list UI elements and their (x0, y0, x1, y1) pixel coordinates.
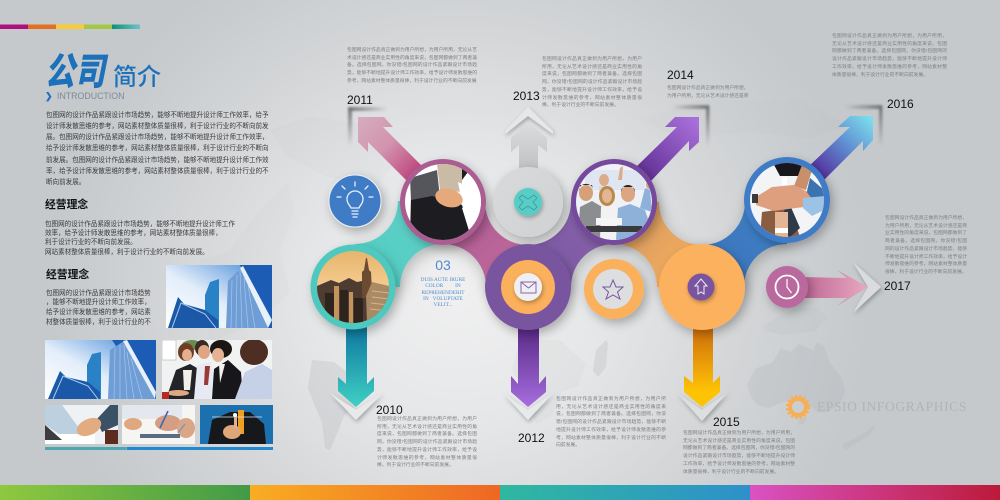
intro paragraph: 断向前发展。 (46, 179, 85, 186)
text: 2016 description: 包图网设计作品真正做到为用户所想，为用户所用，无论从艺术设计感还是商业实用性的角度来说，包图网都做到了两者兼备。选择包图网，你没错!包图网的设计作品紧跟设计市场趋势，能够不断地提升设计师工作效率，给予设计师发散思维的参考，网站素材整体质量很棒，利于设计行业的不断向前发展。 (832, 34, 947, 78)
intro paragraph: 率，给予设计师发散思维的参考，网站素材整体质量很棒，利于设计行业的不 (46, 168, 269, 175)
world map background (200, 100, 875, 450)
heading: 经营理念 second: 经营理念 (46, 269, 89, 281)
title: 公司简介: 公司 (45, 52, 105, 93)
node: lightbulb icon (329, 175, 381, 227)
arrow 2014 (634, 117, 699, 183)
callout: 03: 03 (435, 257, 451, 273)
flowing connector: teal (353, 201, 443, 287)
philosophy paragraph second: ，能够不断地提升设计师工作效率， (46, 299, 151, 306)
intro paragraph: 包图网的设计作品紧跟设计市场趋势，能够不断地提升设计师工作效率，给予 (46, 112, 269, 118)
logo text: EPSIO INFOGRAPHICS (817, 399, 967, 414)
philosophy paragraph: 效率，给予设计师发散思维的参考，网站素材整体质量很棒， (45, 230, 222, 237)
node: upload house icon (659, 244, 745, 330)
philosophy paragraph: 网站素材整体质量很棒，利于设计行业的不断向前发展。 (45, 249, 209, 256)
arrow 2015 (684, 325, 720, 407)
node: city skyline photo (310, 244, 396, 330)
flowing connector: orange (614, 202, 702, 287)
philosophy paragraph: 包图网的设计作品紧跟设计市场趋势，能够不断地提升设计师工作 (45, 220, 235, 228)
year: 2015: 2015 (713, 415, 740, 429)
text: 2014 description: 包图网设计作品真正做到为用户所想， (667, 86, 749, 91)
year: 2016: 2016 (887, 97, 914, 111)
callout: 03: VELIT... (434, 302, 452, 308)
text: 2017 description: 包图网设计作品真正做到为用户所想，为用户所用，无论从艺术设计感还是商业实用性的角度来说，包图网都做到了两者兼备。选择包图网，你没错!包图网的设计作品紧跟设计市场趋势，能够不断地提升设计师工作效率，给予设计师发散思维的参考，网站素材整体质量很棒，利于设计行业的不断向前发展。 (885, 216, 967, 275)
year: 2012: 2012 (518, 431, 545, 445)
philosophy paragraph second (46, 289, 151, 326)
text: 2014 description: 为用户所用，无论从艺术设计感还是商 (667, 94, 749, 99)
callout: 03: COLOR IN (425, 283, 461, 289)
photo: touch screen businessman (200, 405, 273, 444)
bottom colour bar (0, 485, 1000, 500)
intro paragraph: 设计师发散思维的参考，网站素材整体质量很棒，利于设计行业的不断向前发 (46, 123, 269, 130)
subtitle: INTRODUCTION: INTRODUCTION (57, 91, 124, 101)
intro paragraph: 给予设计师发散思维的参考，网站素材整体质量很棒，利于设计行业的不断向 (46, 145, 269, 152)
arrow backplate 2012 (503, 393, 553, 420)
arrow backplate 2010 (330, 393, 383, 420)
node: grey X icon (493, 167, 563, 237)
node: clock icon (766, 266, 808, 308)
callout: 03: REPREHENDERIT (422, 290, 464, 296)
title: 公司简介 (45, 52, 161, 93)
photo: writing at desk (122, 405, 195, 444)
subtitle: INTRODUCTION: ❯ (45, 91, 53, 101)
philosophy paragraph second: 包图网的设计作品紧跟设计市场趋势 (46, 290, 151, 296)
photo: office tower large (45, 340, 156, 399)
node: mail icon (485, 244, 571, 330)
text: 2012 description: 包图网设计作品真正做到为用户所想，为用户所用，无论从艺术设计感还是商业实用性的角度来说，包图网都做到了两者兼备。选择包图网，你没错!包图网的设计作品紧跟设计市场趋势，能够不断地提升设计师工作效率，给予设计师发散思维的参考，网站素材整体质量很棒，利于设计行业的不断向前发展。 (556, 397, 666, 448)
callout: 03: IN VOLUPTATE (423, 296, 463, 302)
photo: business meeting (162, 339, 272, 399)
flowing connector: blue (702, 200, 787, 287)
node: handshake photo (400, 159, 486, 245)
heading: 经营理念: 经营理念 (45, 199, 88, 211)
arrow 2011 (358, 117, 424, 183)
year: 2013: 2013 (513, 89, 540, 103)
flowing connector: magenta (443, 202, 528, 287)
arrow backplate 2017 (853, 262, 881, 313)
philosophy paragraph second: 材整体质量很棒，利于设计行业的不 (46, 319, 151, 326)
intro paragraph: 前发展。包图网的设计作品紧跟设计市场趋势，能够不断地提升设计师工作效 (46, 157, 269, 164)
arrow backplate 2013 (505, 107, 553, 134)
arrow backplate 2016 (845, 105, 882, 146)
philosophy paragraph second: 给予设计师发散思维的参考，网站素 (46, 309, 151, 316)
text: 2010 description: 包图网设计作品真正做到为用户所想，为用户所用，无论从艺术设计感还是商业实用性的角度来说，包图网都做到了两者兼备。选择包图网，你没错!包图网的设计作品紧跟设计市场趋势，能够不断地提升设计师工作效率，给予设计师发散思维的参考，网站素材整体质量很棒，利于设计行业的不断向前发展。 (377, 417, 477, 468)
text: 2013 description: 包图网设计作品真正做到为用户所想，为用户所用，无论从艺术设计感还是商业实用性的角度来说，包图网都做到了两者兼备。选择包图网，你没错!包图网的设计作品紧跟设计市场趋势，能够不断地提升设计师工作效率，给予设计师发散思维的参考，网站素材整体质量很棒，利于设计行业的不断向前发展。 (542, 57, 642, 108)
text: 2014 description (667, 84, 749, 99)
callout: 03: DUIS AUTE IRURE (421, 277, 465, 283)
title: 公司简介: 简介 (113, 64, 161, 91)
node: team photo (571, 159, 657, 245)
intro paragraph (46, 111, 269, 186)
photo: office tower small (166, 265, 272, 328)
node: star icon (584, 259, 644, 319)
logo gear icon (787, 396, 809, 418)
photo underline bars (45, 447, 273, 450)
year: 2011: 2011 (347, 93, 373, 107)
arrow 2016 (806, 116, 873, 183)
arrow 2017 (800, 270, 868, 306)
node: hands team photo (744, 157, 830, 243)
arrow 2012 (511, 325, 546, 407)
text: 2011 description: 包图网设计作品真正做到为用户所想，为用户所用，无论从艺术设计感还是商业实用性的角度来说，包图网都做到了两者兼备。选择包图网，你没错!包图网的设计作品紧跟设计市场趋势，能够不断地提升设计师工作效率，给予设计师发散思维的参考，网站素材整体质量很棒，利于设计行业的不断向前发展 (347, 48, 477, 84)
text: 2011 description: . (347, 87, 348, 92)
text: 2015 description: 包图网设计作品真正做到为用户所想，为用户所用，无论从艺术设计感还是商业实用性的角度来说，包图网都做到了两者兼备。选择包图网，你没错!包图网的设计作品紧跟设计市场趋势，能够不断地提升设计师工作效率，给予设计师发散思维的参考，网站素材整体质量很棒，利于设计行业的不断向前发展。 (683, 431, 795, 475)
arrow backplate 2015 (677, 392, 728, 421)
top colour stripe (0, 24, 140, 29)
intro paragraph: 展。包图网的设计作品紧跟设计市场趋势，能够不断地提升设计师工作效率， (46, 134, 269, 141)
year: 2017: 2017 (884, 279, 911, 293)
photo: handshake small (45, 405, 118, 444)
arrow backplate 2011 (348, 107, 386, 145)
arrow backplate 2014 (672, 105, 710, 146)
callout: 03 (420, 257, 466, 308)
philosophy paragraph (45, 220, 235, 256)
philosophy paragraph: 利于设计行业的不断向前发展。 (45, 239, 137, 246)
arrow 2013 (511, 122, 547, 174)
arrow 2010 (338, 325, 374, 407)
year: 2010: 2010 (376, 403, 403, 417)
year: 2014: 2014 (667, 68, 694, 82)
flowing connector: purple (528, 202, 614, 287)
